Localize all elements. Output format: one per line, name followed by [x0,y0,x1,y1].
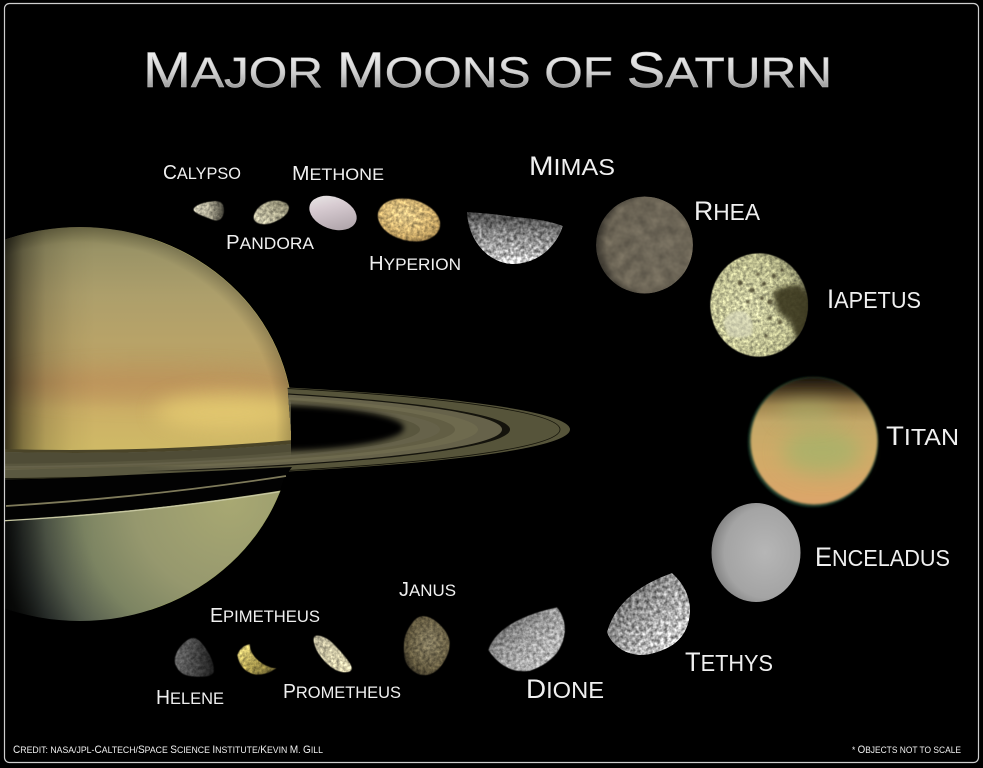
credit line: CREDIT: NASA/JPL-CALTECH/SPACE SCIENCE INSTITUTE/KEVIN M. GILL [13,744,323,756]
label: Calypso: CALYPSO [163,162,241,184]
label: Titan: TITAN [886,421,959,451]
label: Tethys: TETHYS [685,647,773,677]
label: Hyperion: HYPERION [369,253,461,275]
label: Rhea: RHEA [694,196,761,226]
moon: Janus [404,616,450,676]
planet lower hemisphere [5,490,280,621]
scale note: * OBJECTS NOT TO SCALE [852,744,961,756]
moon: Iapetus [710,253,815,357]
thin ring stripe on planet [6,476,286,506]
planet shadow on rings [291,402,407,454]
label: Methone: METHONE [292,163,384,185]
moon: Mimas [467,212,563,264]
moon: Pandora [253,200,289,225]
label: Dione: DIONE [526,674,604,704]
moon: Calypso [193,201,224,221]
rings [0,380,570,480]
moon: Hyperion [373,192,445,248]
label: Iapetus: IAPETUS [827,284,921,314]
title: MAJOR MOONS OF SATURN [143,42,832,98]
moon: Rhea [596,196,693,294]
label: Mimas: MIMAS [529,151,615,181]
frame mask left [0,0,4,768]
moon: Tethys [607,573,690,655]
label: Prometheus: PROMETHEUS [283,681,401,703]
dark ring shadow band [0,467,292,520]
Saturn with rings [0,220,570,630]
label: Pandora: PANDORA [226,232,315,254]
moon: Dione [488,607,565,672]
moon: Methone [305,190,361,236]
moon: Prometheus [313,635,352,673]
planet upper hemisphere [5,227,291,453]
label: Epimetheus: EPIMETHEUS [210,605,320,627]
label: Helene: HELENE [156,687,224,709]
label: Janus: JANUS [399,579,456,601]
moon: Epimetheus [237,644,277,675]
label: Enceladus: ENCELADUS [815,542,950,572]
moon: Enceladus [712,503,800,602]
moon: Helene [174,638,214,677]
ring front left without Cassini gap [0,465,205,478]
moon: Titan [748,377,878,507]
